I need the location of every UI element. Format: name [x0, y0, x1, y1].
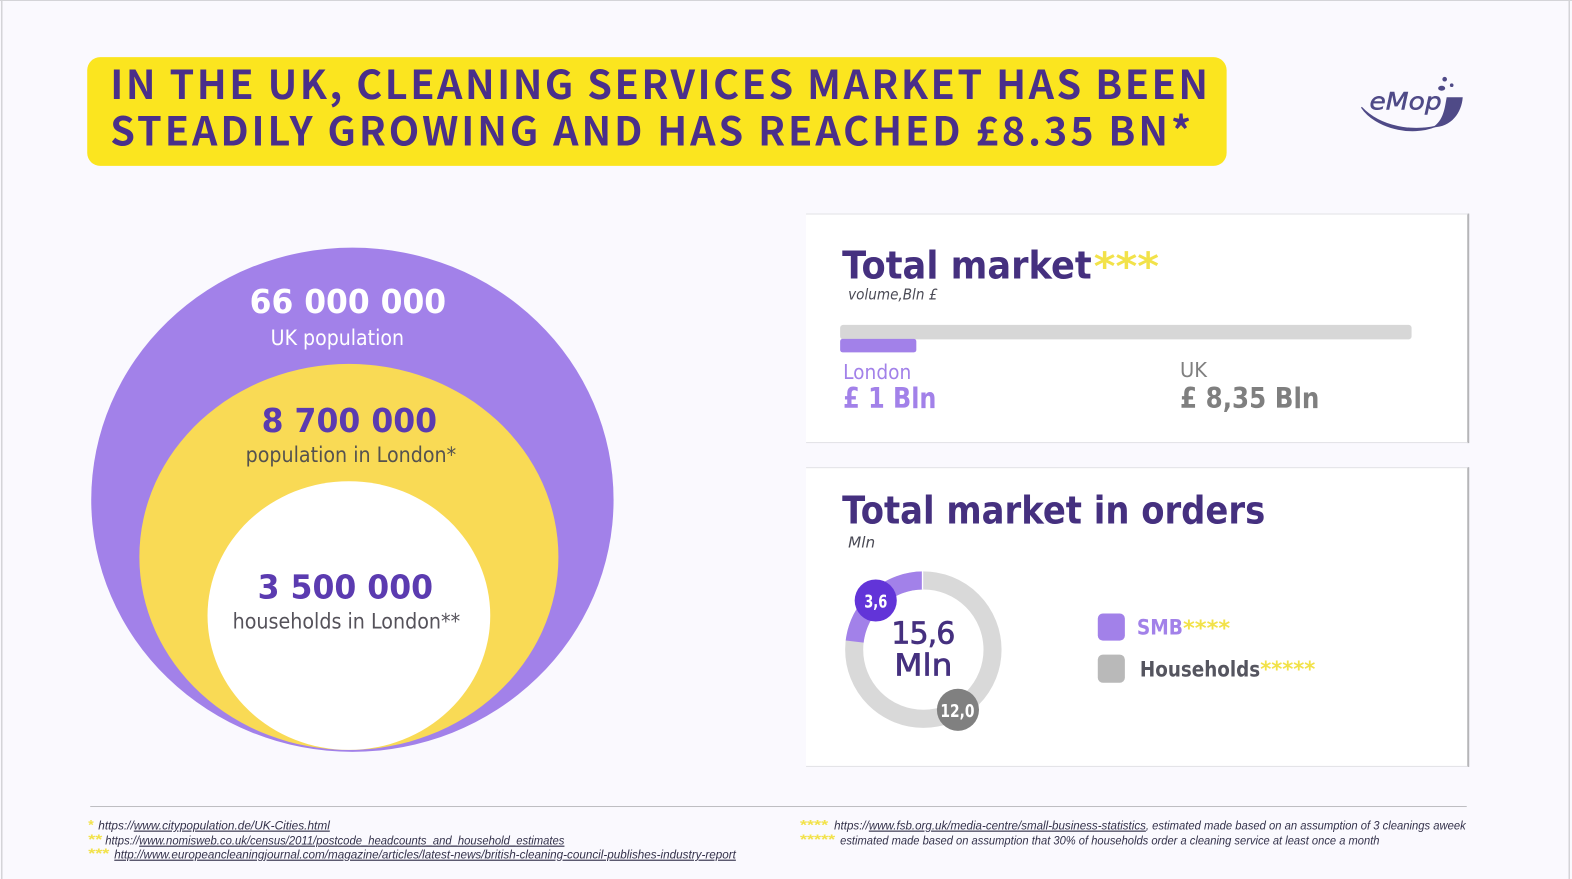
circle: households in London: households in London** — [233, 609, 460, 634]
footnotes: right: , estimated made based on an assumption of 3 cleanings aweek — [1146, 821, 1467, 833]
logo: eMop: eMop — [1369, 87, 1442, 115]
panel: total market in orders — [806, 467, 1469, 767]
label: UK value — [1180, 358, 1319, 415]
panel: total market — [806, 214, 1469, 443]
label: London value: £ 1 Bln — [843, 382, 936, 415]
footnotes: right: **** — [800, 817, 829, 833]
title banner: STEADILY GROWING AND HAS REACHED £8.35 BN* — [110, 100, 1191, 157]
title banner — [87, 54, 1227, 166]
label: UK value: UK — [1180, 358, 1208, 382]
label: London value: London — [843, 360, 911, 384]
circle: population in London: 8 700 000 — [262, 401, 437, 440]
footnotes: left: *** — [88, 845, 110, 861]
badge: SMB value: 3,6 — [864, 592, 887, 613]
label: UK value: £ 8,35 Bln — [1180, 382, 1319, 415]
circle: UK population: 66 000 000 — [250, 282, 446, 321]
label: London value — [843, 360, 936, 415]
legend: SMB: **** — [1183, 616, 1230, 641]
nested population circles — [91, 248, 614, 752]
legend: households — [1098, 655, 1315, 683]
bar: UK total — [840, 325, 1412, 339]
circle: households in London: 3 500 000 — [258, 567, 433, 606]
heading: total market: *** — [1094, 245, 1159, 289]
donut chart — [854, 570, 993, 731]
circle: households in London — [208, 481, 490, 750]
footnotes: right: ***** — [800, 831, 836, 847]
footnotes: left: * — [88, 817, 94, 833]
footnotes: right — [800, 817, 1467, 848]
footnotes: left: https://www.citypopulation.de/UK-Cities.html — [98, 821, 330, 833]
donut chart: 15,6 — [891, 617, 955, 652]
heading: total market in orders: Total market in orders — [842, 488, 1265, 532]
footnotes: left: http://www.europeancleaningjournal.com/magazine/articles/latest-news/british-cleaning-council-publishes-industry-report — [114, 850, 737, 862]
footnotes: right: estimated made based on assumption that 30% of households order a cleaning service at least once a month — [840, 836, 1380, 848]
footnotes: left: ** — [88, 831, 103, 847]
subheading: volume: volume,Bln £ — [848, 286, 938, 304]
donut chart: Mln — [894, 649, 952, 684]
heading: total market: Total market — [842, 244, 1092, 288]
circle: population in London — [139, 364, 558, 750]
footnotes: left: https://www.nomisweb.co.uk/census/2011/postcode_headcounts_and_household_estimates — [105, 836, 565, 848]
legend: SMB — [1098, 614, 1230, 641]
badge: households value: 12,0 — [940, 701, 974, 722]
footnotes: left — [88, 817, 737, 862]
legend: households: ***** — [1260, 657, 1315, 682]
badge: SMB value — [855, 579, 897, 622]
legend — [1098, 614, 1315, 683]
footnotes: right: https://www.fsb.org.uk/media-centre/small-business-statistics — [834, 821, 1146, 833]
title banner: IN THE UK, CLEANING SERVICES MARKET HAS BEEN — [110, 54, 1208, 111]
legend: households: Households — [1140, 657, 1260, 682]
circle: population in London: population in London* — [246, 442, 456, 467]
badge: households value — [937, 689, 979, 731]
subheading: Mln: Mln — [848, 533, 875, 551]
bar: London — [840, 339, 916, 352]
legend: SMB: SMB — [1137, 615, 1183, 640]
logo: eMop — [1361, 77, 1463, 131]
circle: UK population: UK population — [271, 325, 404, 350]
circle: UK population — [91, 248, 614, 752]
